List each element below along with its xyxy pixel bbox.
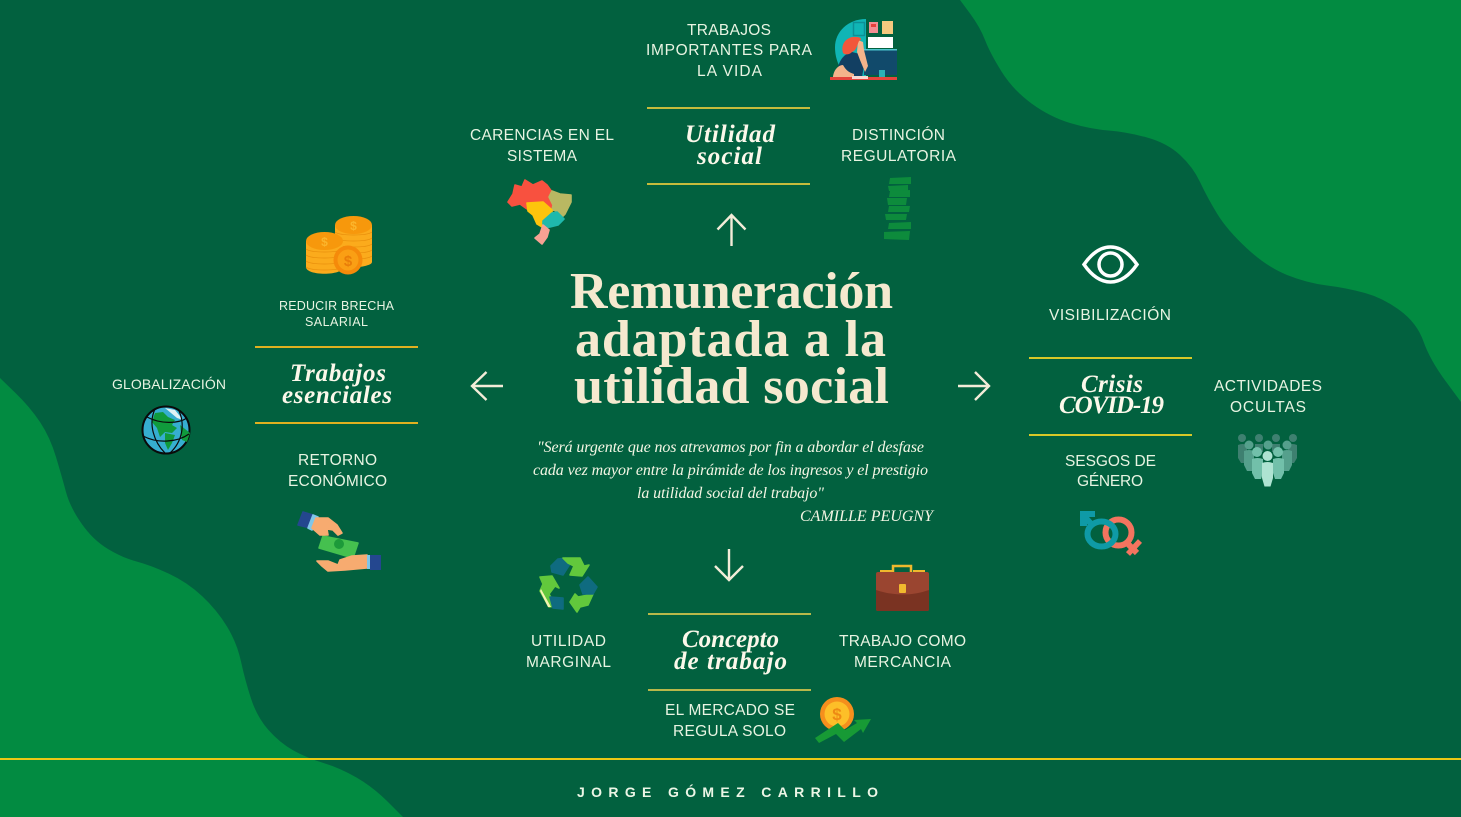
icon: brazil map (508, 180, 571, 244)
arrow: right (958, 372, 989, 400)
label: distincion: DISTINCIÓN (852, 127, 945, 144)
label: trabajo como mercancia: MERCANCIA (854, 654, 952, 671)
heading: crisis covid-19: Crisis (1081, 371, 1143, 398)
label: actividades ocultas (1214, 378, 1322, 416)
heading: concepto de trabajo: de trabajo (674, 648, 787, 675)
label: actividades ocultas: OCULTAS (1230, 399, 1306, 416)
label: reducir brecha: SALARIAL (305, 315, 368, 329)
label: retorno economico (288, 452, 387, 490)
heading: utilidad social: Utilidad (685, 121, 776, 148)
label: carencias: CARENCIAS EN EL (470, 127, 614, 144)
heading: crisis covid-19: COVID-19 (1059, 392, 1164, 419)
label: el mercado se regula solo: EL MERCADO SE (665, 702, 795, 719)
panel: crisis covid-19 (1029, 357, 1192, 436)
panel: concepto de trabajo (648, 613, 811, 691)
label: distincion (841, 127, 957, 165)
label: carencias (470, 127, 614, 165)
icon: recycle (540, 558, 597, 612)
label: el mercado se regula solo: REGULA SOLO (673, 723, 786, 740)
icon: coin stacks: $ (350, 219, 357, 233)
label: trabajos importantes: TRABAJOS (687, 22, 771, 39)
heading: trabajos esenciales: Trabajos (290, 360, 386, 387)
label: trabajo como mercancia (839, 633, 966, 671)
arrow: left (472, 372, 503, 400)
label: trabajo como mercancia: TRABAJO COMO (839, 633, 966, 650)
label: trabajos importantes: IMPORTANTES PARA (646, 42, 813, 59)
label: reducir brecha (279, 299, 395, 329)
label: globalizacion: GLOBALIZACIÓN (112, 376, 226, 392)
background blob: top right (960, 0, 1461, 402)
icon: coin with rising arrow (815, 697, 871, 743)
heading: concepto de trabajo: Concepto (682, 626, 779, 653)
quote: cada vez mayor entre la pirámide de los ingresos y el prestigio (533, 462, 928, 479)
icon: coin stacks: $ (321, 235, 328, 249)
icon: gender symbols (1080, 511, 1140, 554)
label: visibilizacion: VISIBILIZACIÓN (1049, 307, 1171, 324)
quote (533, 439, 935, 525)
icon: eye (1084, 247, 1137, 282)
label: trabajos importantes (646, 22, 813, 80)
arrow: up (718, 215, 746, 246)
background blob: bottom left (0, 378, 403, 817)
label: utilidad marginal: MARGINAL (526, 654, 611, 671)
label: distincion: REGULATORIA (841, 148, 957, 165)
main title: adaptada a la (575, 311, 886, 368)
icon: briefcase (876, 566, 929, 611)
heading: utilidad social (685, 121, 776, 170)
heading: utilidad social: social (696, 143, 762, 170)
label: sesgos de genero: GÉNERO (1077, 473, 1143, 490)
panel: trabajos esenciales (255, 346, 418, 424)
heading: concepto de trabajo (674, 626, 787, 675)
heading: trabajos esenciales (282, 360, 392, 409)
panel: utilidad social (647, 107, 810, 185)
icon: globe (142, 406, 190, 454)
label: sesgos de genero (1065, 453, 1156, 490)
label: carencias: SISTEMA (507, 148, 578, 165)
quote: la utilidad social del trabajo" (637, 485, 824, 502)
quote: "Será urgente que nos atrevamos por fin a abordar el desfase (537, 439, 924, 456)
label: actividades ocultas: ACTIVIDADES (1214, 378, 1322, 395)
label: retorno economico: ECONÓMICO (288, 473, 387, 490)
icon: coin stacks (306, 216, 372, 274)
footer rule (0, 758, 1461, 760)
label: utilidad marginal (526, 633, 611, 671)
icon: coin stacks: $ (344, 253, 353, 270)
icon: group of people (1238, 434, 1297, 486)
arrow: down (715, 549, 743, 580)
icon: stacked green bars (884, 177, 911, 240)
main title: utilidad social (574, 358, 889, 415)
quote: CAMILLE PEUGNY (800, 508, 935, 525)
label: retorno economico: RETORNO (298, 452, 377, 469)
heading: crisis covid-19 (1059, 371, 1164, 419)
main title (570, 263, 893, 415)
label: reducir brecha: REDUCIR BRECHA (279, 299, 395, 313)
label: el mercado se regula solo (665, 702, 795, 740)
label: sesgos de genero: SESGOS DE (1065, 453, 1156, 470)
label: utilidad marginal: UTILIDAD (531, 633, 606, 650)
icon: hands with banknote (298, 512, 381, 571)
heading: trabajos esenciales: esenciales (282, 382, 392, 409)
icon: coin with rising arrow: $ (832, 705, 842, 724)
icon: office worker (830, 19, 897, 80)
main title: Remuneración (570, 263, 893, 320)
label: trabajos importantes: LA VIDA (697, 63, 763, 80)
footer author: JORGE GÓMEZ CARRILLO (577, 783, 878, 800)
